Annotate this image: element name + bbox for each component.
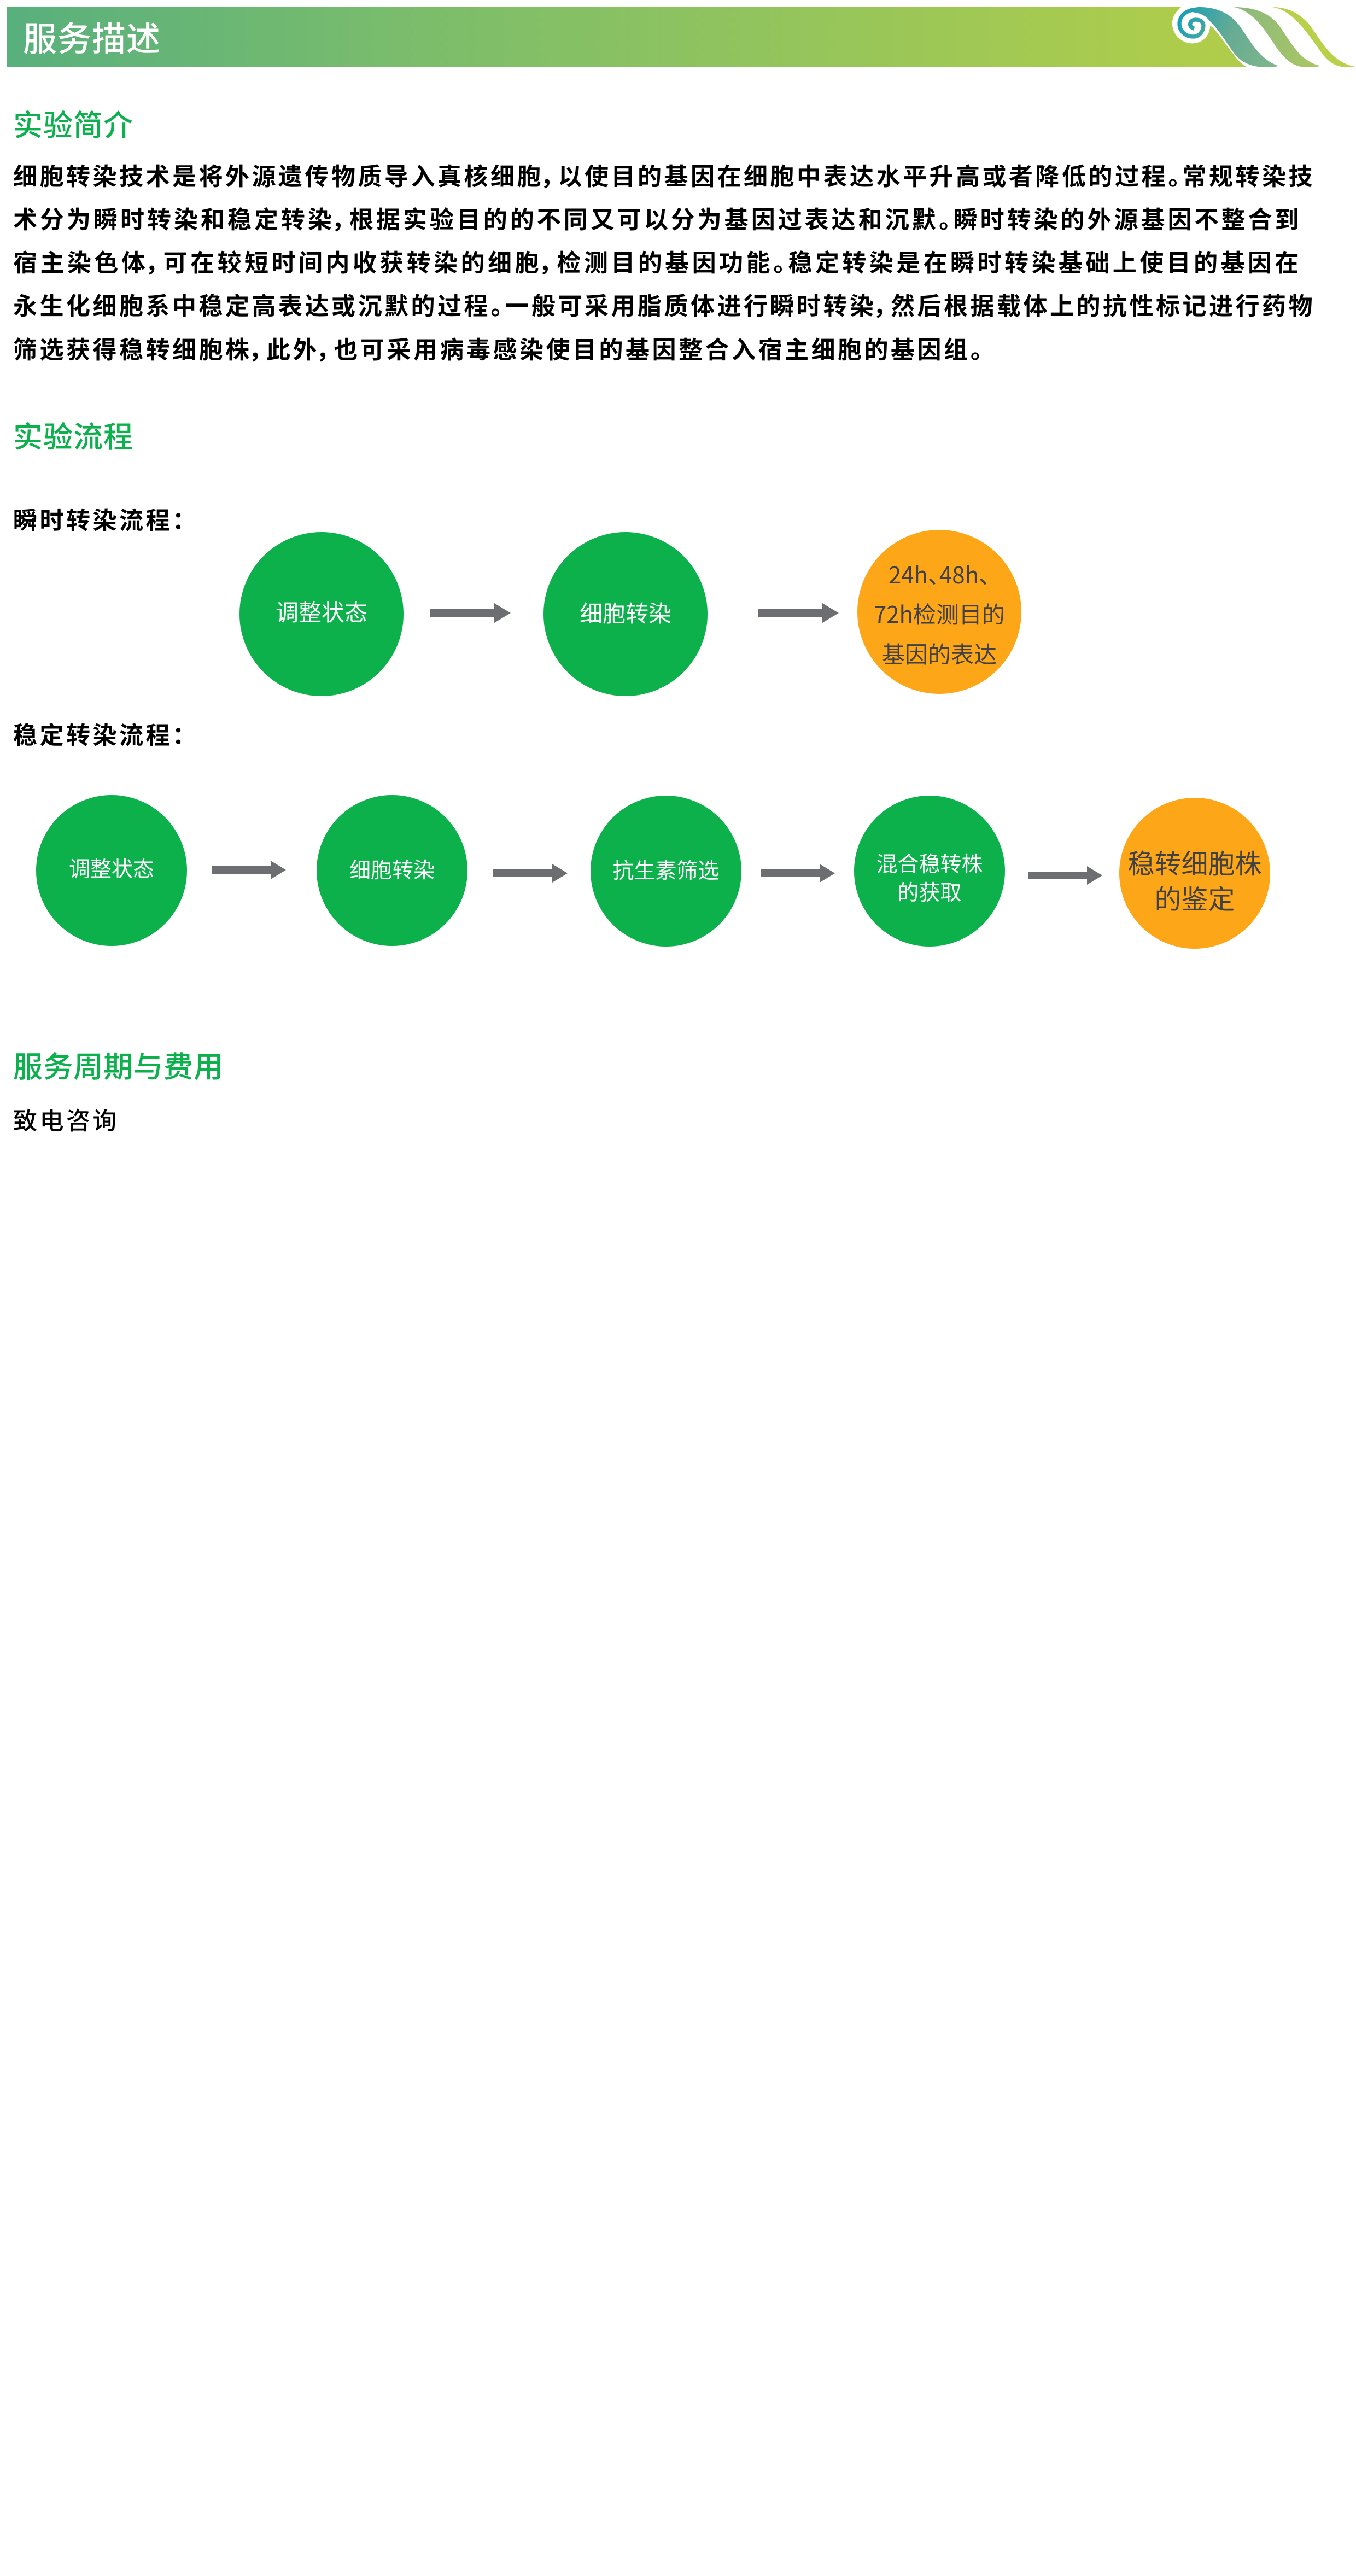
flow step: 稳转细胞株的鉴定: 稳转细胞株 [1127, 843, 1262, 881]
text block: introduction: 细胞转染技术是将外源遗传物质导入真核细胞，以使目的基因在细胞中表达水平升高或者降低的过程。常规转染技 [13, 157, 1315, 192]
arrow [1028, 866, 1102, 885]
arrow [430, 603, 511, 623]
text block: introduction: 永生化细胞系中稳定高表达或沉默的过程。一般可采用脂质体进行瞬时转染，然后根据载体上的抗性标记进行药物 [13, 287, 1315, 322]
flow step: 抗生素筛选 [591, 796, 741, 947]
flow step: 抗生素筛选: 抗生素筛选 [612, 854, 720, 885]
flow step: 调整状态: 调整状态 [276, 594, 367, 628]
arrow [761, 864, 835, 883]
heading: 实验简介: 实验简介 [13, 101, 133, 144]
heading: 服务周期与费用: 服务周期与费用 [13, 1043, 224, 1086]
flow step: 细胞转染: 细胞转染 [349, 854, 435, 884]
header banner [7, 7, 1355, 67]
arrow [212, 861, 286, 879]
text: 致电咨询: 致电咨询 [13, 1101, 119, 1136]
text block: introduction: 宿主染色体，可在较短时间内收获转染的细胞，检测目的基因功能。稳定转染是在瞬时转染基础上使目的基因在 [13, 243, 1301, 278]
label: 瞬时转染流程: 瞬时转染流程： [13, 501, 187, 536]
flow step: 细胞转染 [543, 532, 708, 696]
heading: 实验流程: 实验流程 [13, 413, 133, 456]
flow step: 调整状态 [239, 532, 404, 696]
flow step: 调整状态: 调整状态 [69, 852, 154, 883]
flow step: 混合稳转株的获取: 混合稳转株 [876, 848, 983, 878]
flow step: 混合稳转株的获取 [854, 796, 1005, 947]
flow step: 稳转细胞株的鉴定: 的鉴定 [1154, 878, 1235, 917]
flow step: 细胞转染 [317, 795, 467, 946]
text block: introduction: 筛选获得稳转细胞株，此外，也可采用病毒感染使目的基因整合入宿主细胞的基因组。 [13, 330, 985, 365]
flow step: 检测目的基因的表达: 72h检测目的 [874, 597, 1005, 630]
flow step: 稳转细胞株的鉴定 [1119, 798, 1270, 949]
arrow [758, 603, 839, 623]
flow step: 检测目的基因的表达: 24h、48h、 [889, 557, 990, 591]
flow step: 细胞转染: 细胞转染 [580, 595, 671, 629]
flow step: 调整状态 [36, 795, 187, 946]
text block: introduction: 术分为瞬时转染和稳定转染，根据实验目的的不同又可以分为基因过表达和沉默。瞬时转染的外源基因不整合到 [13, 200, 1301, 235]
label: 稳定转染流程: 稳定转染流程： [13, 716, 187, 751]
flow step: 混合稳转株的获取: 的获取 [897, 876, 961, 907]
flow step: 检测目的基因的表达 [857, 530, 1021, 694]
title: 服务描述 [23, 11, 161, 61]
arrow [493, 864, 568, 883]
flow step: 检测目的基因的表达: 基因的表达 [882, 636, 997, 670]
text block: introduction [13, 157, 1315, 365]
